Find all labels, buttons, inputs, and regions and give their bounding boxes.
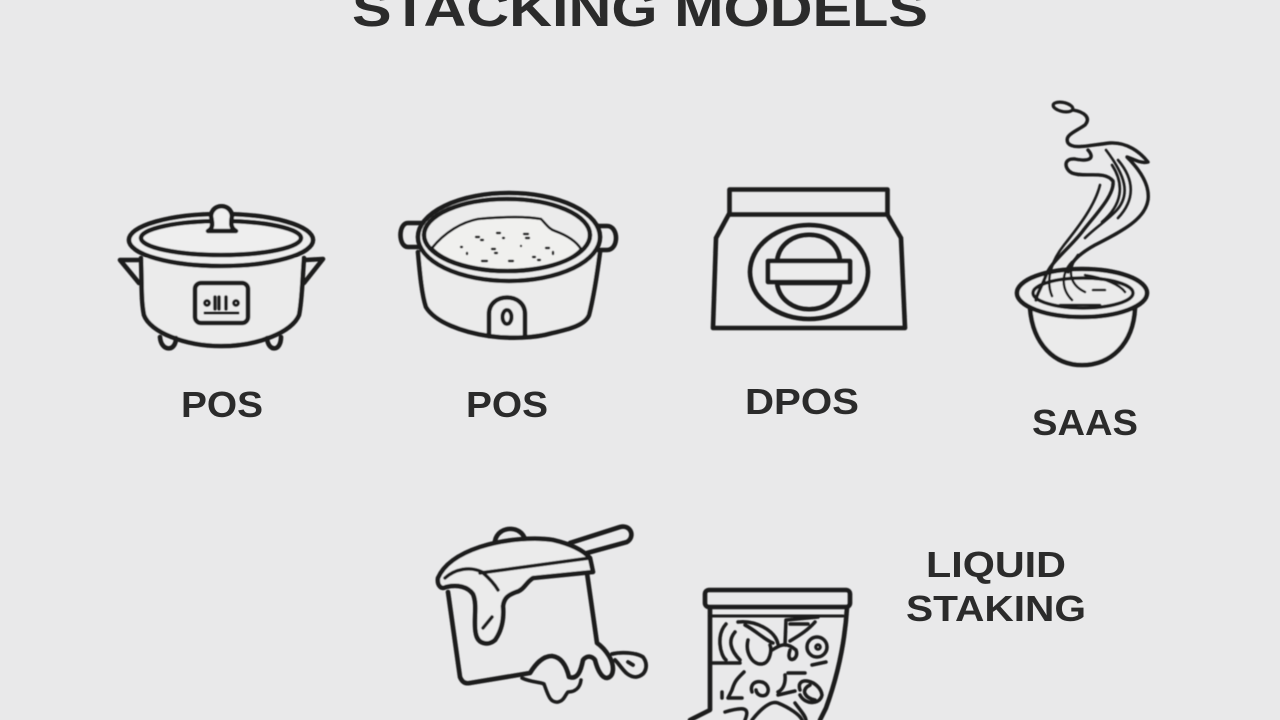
icon: bowl with rising steam — [1017, 101, 1148, 365]
icon: bag of noodles and toppings — [690, 590, 850, 720]
icon: package with round emblem — [713, 190, 905, 328]
icon: slow cooker with lid — [120, 206, 323, 348]
icon: overflowing pot — [438, 527, 646, 702]
label: POS: POS — [181, 384, 263, 425]
label: DPOS: DPOS — [745, 381, 859, 422]
label: SAAS: SAAS — [1032, 402, 1138, 443]
label: Liquid Staking — [906, 544, 1086, 629]
label: Liquid Staking: STAKING — [906, 588, 1086, 629]
icon: open rice cooker — [400, 193, 616, 338]
label: Liquid Staking: LIQUID — [926, 544, 1066, 585]
label: POS: POS — [466, 384, 548, 425]
